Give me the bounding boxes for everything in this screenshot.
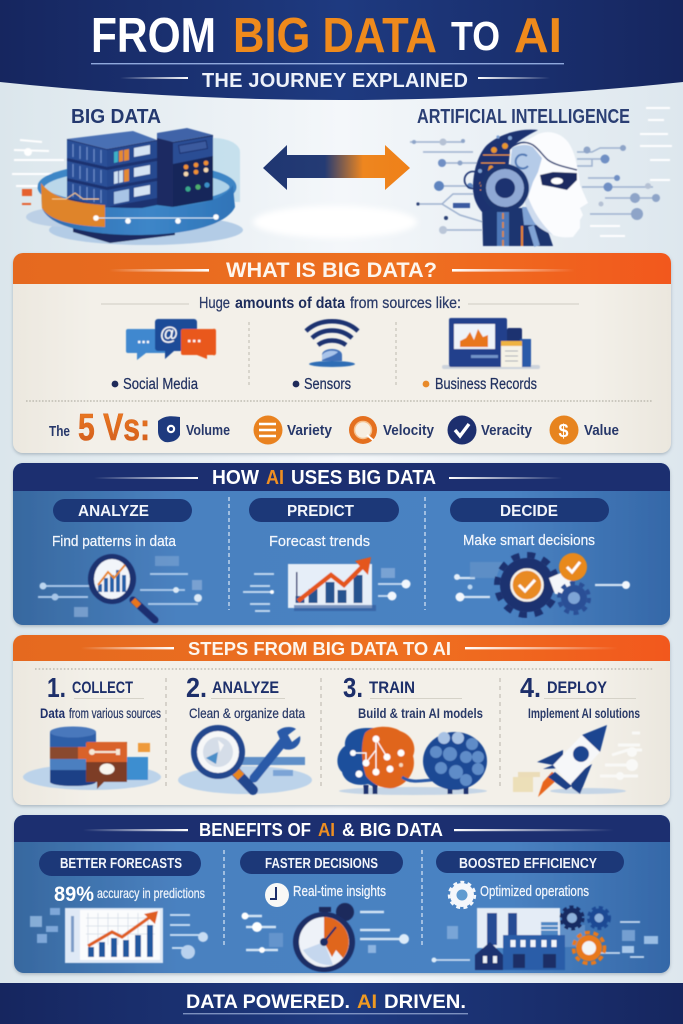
step 3: train: TRAIN	[369, 678, 415, 697]
intro line: from sources like:	[350, 295, 461, 312]
step 1: collect: from various sources	[69, 705, 161, 721]
icon: factory and gears	[432, 907, 658, 970]
icon: variety	[254, 416, 282, 444]
the 5 Vs: Veracity	[481, 423, 532, 439]
source labels: Business Records	[435, 376, 537, 393]
panel heading: & BIG DATA	[342, 819, 443, 840]
icon: gears and check	[454, 553, 630, 615]
ear headphone	[464, 172, 482, 188]
data ring	[41, 183, 235, 235]
intro line	[101, 295, 579, 312]
icon: clock	[265, 883, 289, 907]
step 2: analyze: ANALYZE	[212, 678, 279, 697]
column: better forecasts: BETTER FORECASTS	[60, 856, 182, 872]
icon: value: $	[558, 421, 569, 441]
skull circuitry	[473, 130, 538, 212]
column: decide: Make smart decisions	[463, 532, 595, 549]
column: predict: PREDICT	[287, 503, 354, 520]
step 4: deploy	[513, 672, 642, 797]
the 5 Vs: The	[49, 423, 70, 440]
step 1: collect: COLLECT	[72, 678, 133, 697]
column: analyze: Find patterns in data	[52, 533, 177, 550]
icon: value	[550, 416, 578, 444]
icon: brain and neural network	[337, 727, 487, 795]
the 5 Vs: Value	[584, 423, 619, 439]
icon: trend chart	[243, 557, 410, 611]
panel: steps from big data to AI	[13, 635, 670, 805]
icon: volume	[158, 416, 180, 442]
step 1: collect: 1.	[47, 672, 66, 703]
source labels: Sensors	[304, 376, 351, 393]
icon: sensor	[306, 321, 358, 367]
the 5 Vs: Velocity	[383, 423, 434, 439]
panel heading: USES BIG DATA	[291, 467, 436, 489]
step 2: analyze: 2.	[186, 672, 207, 703]
panel heading	[94, 467, 562, 489]
panel heading: AI	[318, 819, 335, 840]
panel heading: WHAT IS BIG DATA?	[226, 258, 437, 282]
title: FROM	[91, 9, 216, 63]
double arrow	[263, 145, 410, 190]
footer slogan: DRIVEN.	[384, 992, 466, 1013]
icon: bar chart card	[30, 908, 208, 963]
heading: artificial intelligence: ARTIFICIAL INTELLIGENCE	[417, 106, 630, 128]
neck	[482, 207, 553, 246]
column: boosted efficiency	[432, 851, 658, 970]
server stack	[67, 128, 213, 215]
icon: database and data cards	[23, 726, 161, 790]
panel heading: BENEFITS OF	[199, 819, 311, 840]
step 4: deploy: 4.	[520, 672, 541, 703]
mask and eye	[540, 172, 577, 190]
heading: big data: BIG DATA	[71, 105, 161, 128]
icon: magnifier and wrench	[178, 725, 312, 794]
panel heading: AI	[266, 467, 284, 489]
icon: veracity	[448, 416, 476, 444]
icon: magnifier with chart	[38, 554, 202, 620]
title: AI	[514, 9, 562, 63]
face	[510, 132, 588, 237]
column: boosted efficiency: Optimized operations	[480, 884, 589, 900]
icon: business records	[442, 318, 540, 369]
circuit lines	[410, 142, 657, 230]
column: predict: Forecast trends	[269, 533, 370, 550]
icon: stopwatch	[242, 903, 409, 972]
column: better forecasts: 89%	[54, 883, 94, 906]
the 5 Vs	[49, 407, 619, 449]
the 5 Vs: Volume	[186, 423, 230, 439]
step 2: analyze: Clean & organize data	[189, 705, 305, 721]
title: TO	[451, 13, 500, 59]
icon: social media bubbles	[126, 319, 216, 360]
step 1: collect: Data	[40, 705, 65, 721]
column: predict	[243, 498, 410, 611]
panel heading: HOW	[212, 467, 259, 489]
intro line: amounts of data	[235, 295, 345, 312]
column: faster decisions: Real-time insights	[293, 884, 386, 900]
subtitle: THE JOURNEY EXPLAINED	[202, 70, 468, 92]
step 1: collect	[23, 672, 161, 790]
footer slogan	[186, 992, 466, 1013]
column: better forecasts	[30, 851, 208, 963]
step 2: analyze	[178, 672, 312, 794]
soft white glow below header	[253, 206, 417, 238]
panel: what is big data	[13, 253, 671, 453]
icon: social media bubbles: @	[160, 324, 178, 345]
footer banner	[0, 983, 683, 1024]
column: better forecasts: accuracy in predictions	[97, 885, 205, 901]
column: analyze	[38, 499, 202, 620]
source labels: Social Media	[123, 376, 198, 393]
footer slogan: AI	[357, 992, 377, 1013]
illustration: AI robot head	[410, 108, 672, 246]
panel: benefits of AI and big data	[14, 815, 670, 973]
source labels	[112, 376, 537, 393]
step 3: train	[337, 672, 487, 795]
footer slogan: DATA POWERED.	[186, 992, 350, 1013]
step 4: deploy: DEPLOY	[547, 678, 608, 697]
step 3: train: 3.	[343, 672, 363, 703]
panel heading	[83, 819, 614, 840]
panel heading: STEPS FROM BIG DATA TO AI	[188, 639, 451, 659]
step 4: deploy: Implement AI solutions	[528, 705, 640, 721]
icon: rocket	[513, 725, 642, 797]
panel: how AI uses big data	[13, 463, 670, 625]
header banner	[0, 0, 683, 100]
icon: velocity	[349, 416, 377, 444]
title: BIG DATA	[233, 9, 437, 63]
the 5 Vs: 5 Vs:	[78, 407, 150, 449]
title	[91, 9, 562, 63]
icon: gear badge	[449, 882, 475, 908]
step 3: train: Build & train AI models	[358, 705, 483, 721]
column: faster decisions: FASTER DECISIONS	[265, 856, 378, 872]
the 5 Vs: Variety	[287, 423, 332, 439]
column: decide	[450, 498, 630, 615]
column: boosted efficiency: BOOSTED EFFICIENCY	[459, 856, 597, 872]
column: faster decisions	[240, 851, 409, 972]
illustration: big data server and ring	[12, 128, 243, 245]
intro line: Huge	[199, 295, 230, 312]
column: decide: DECIDE	[500, 503, 558, 520]
column: analyze: ANALYZE	[78, 503, 149, 520]
